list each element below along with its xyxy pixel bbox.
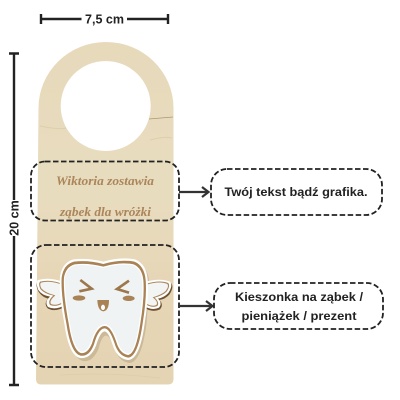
icon: tooth with wings (36, 258, 172, 363)
highlight box: pocket area (31, 245, 179, 367)
highlight box: text area (31, 162, 179, 220)
callout: pocket for tooth: Kieszonka na ząbek / (235, 290, 364, 304)
width label: 7,5 cm (85, 12, 124, 26)
arrow: text area to label (179, 187, 208, 197)
right wing (143, 280, 172, 311)
height label: 20 cm (8, 200, 22, 236)
arrow: pocket to label (179, 301, 212, 311)
width dimension (41, 12, 168, 26)
callout: pocket for tooth (214, 283, 383, 329)
left wing (36, 279, 66, 310)
callout: text or graphic (211, 169, 382, 215)
callout: pocket for tooth: pieniążek / prezent (242, 309, 356, 323)
door hanger wooden board (36, 42, 174, 385)
tooth shadow (62, 263, 149, 363)
height dimension (8, 54, 22, 385)
tooth face (73, 280, 135, 311)
tooth body (60, 258, 148, 360)
engraved text (56, 173, 155, 219)
callout: text or graphic: Twój tekst bądź grafika. (224, 185, 368, 199)
engraved text: ząbek dla wróżki (59, 204, 151, 219)
engraved text: Wiktoria zostawia (56, 173, 155, 188)
